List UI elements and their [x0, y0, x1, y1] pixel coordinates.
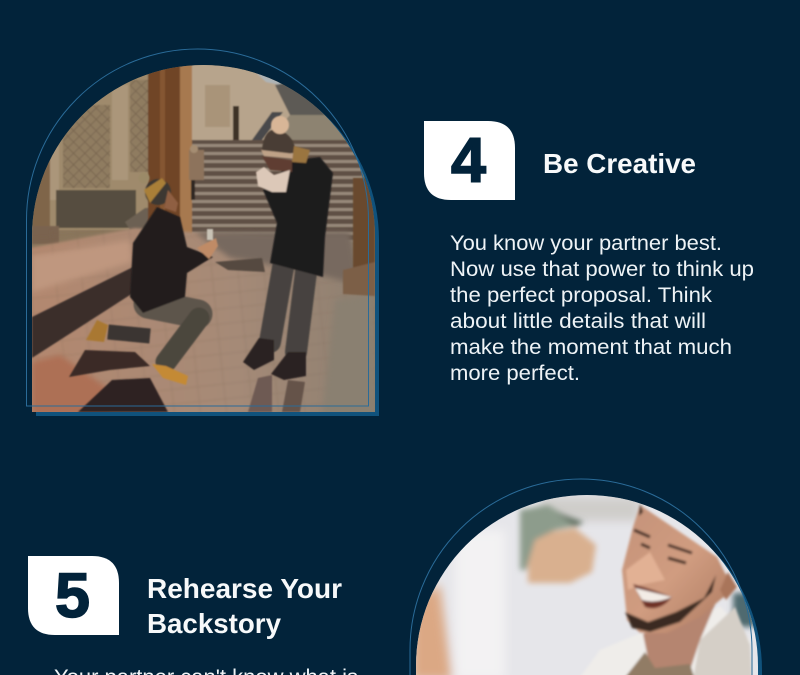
heading: Rehearse Your Backstory: Backstory: [147, 608, 281, 639]
body text: step 4: about little details that will: [450, 310, 706, 333]
arch offset blue shadow: [36, 68, 379, 416]
arch offset blue shadow: [420, 499, 762, 675]
panel: step 5 text: [28, 556, 358, 675]
figure: kneeling man: [86, 172, 218, 385]
arch thin outline: [26, 49, 369, 406]
badge: number 5: [28, 556, 119, 635]
body text: step 4: the perfect proposal. Think: [450, 284, 713, 307]
body text: step 4: [450, 232, 754, 385]
body text: step 4: You know your partner best.: [450, 232, 722, 255]
body text: step 4: more perfect.: [450, 362, 580, 385]
badge: number 5: 5: [55, 561, 90, 631]
photo: proposal on the terrace: [30, 60, 380, 415]
panel: step 4 photo arch: [26, 49, 380, 416]
badge: number 4: [424, 121, 515, 200]
figure: standing woman: [243, 116, 333, 380]
heading: Rehearse Your Backstory: [147, 573, 342, 639]
panel: step 5 photo arch: [410, 479, 765, 675]
photo: smiling man: [410, 490, 765, 675]
arch thin outline: [410, 479, 752, 675]
badge: number 4: 4: [451, 126, 486, 196]
body text: step 4: Now use that power to think up: [450, 258, 754, 281]
heading: Rehearse Your Backstory: Rehearse Your: [147, 573, 342, 604]
panel: step 4 text: [424, 121, 754, 385]
body text: step 4: make the moment that much: [450, 336, 732, 359]
heading: Be Creative: Be Creative: [543, 148, 696, 179]
